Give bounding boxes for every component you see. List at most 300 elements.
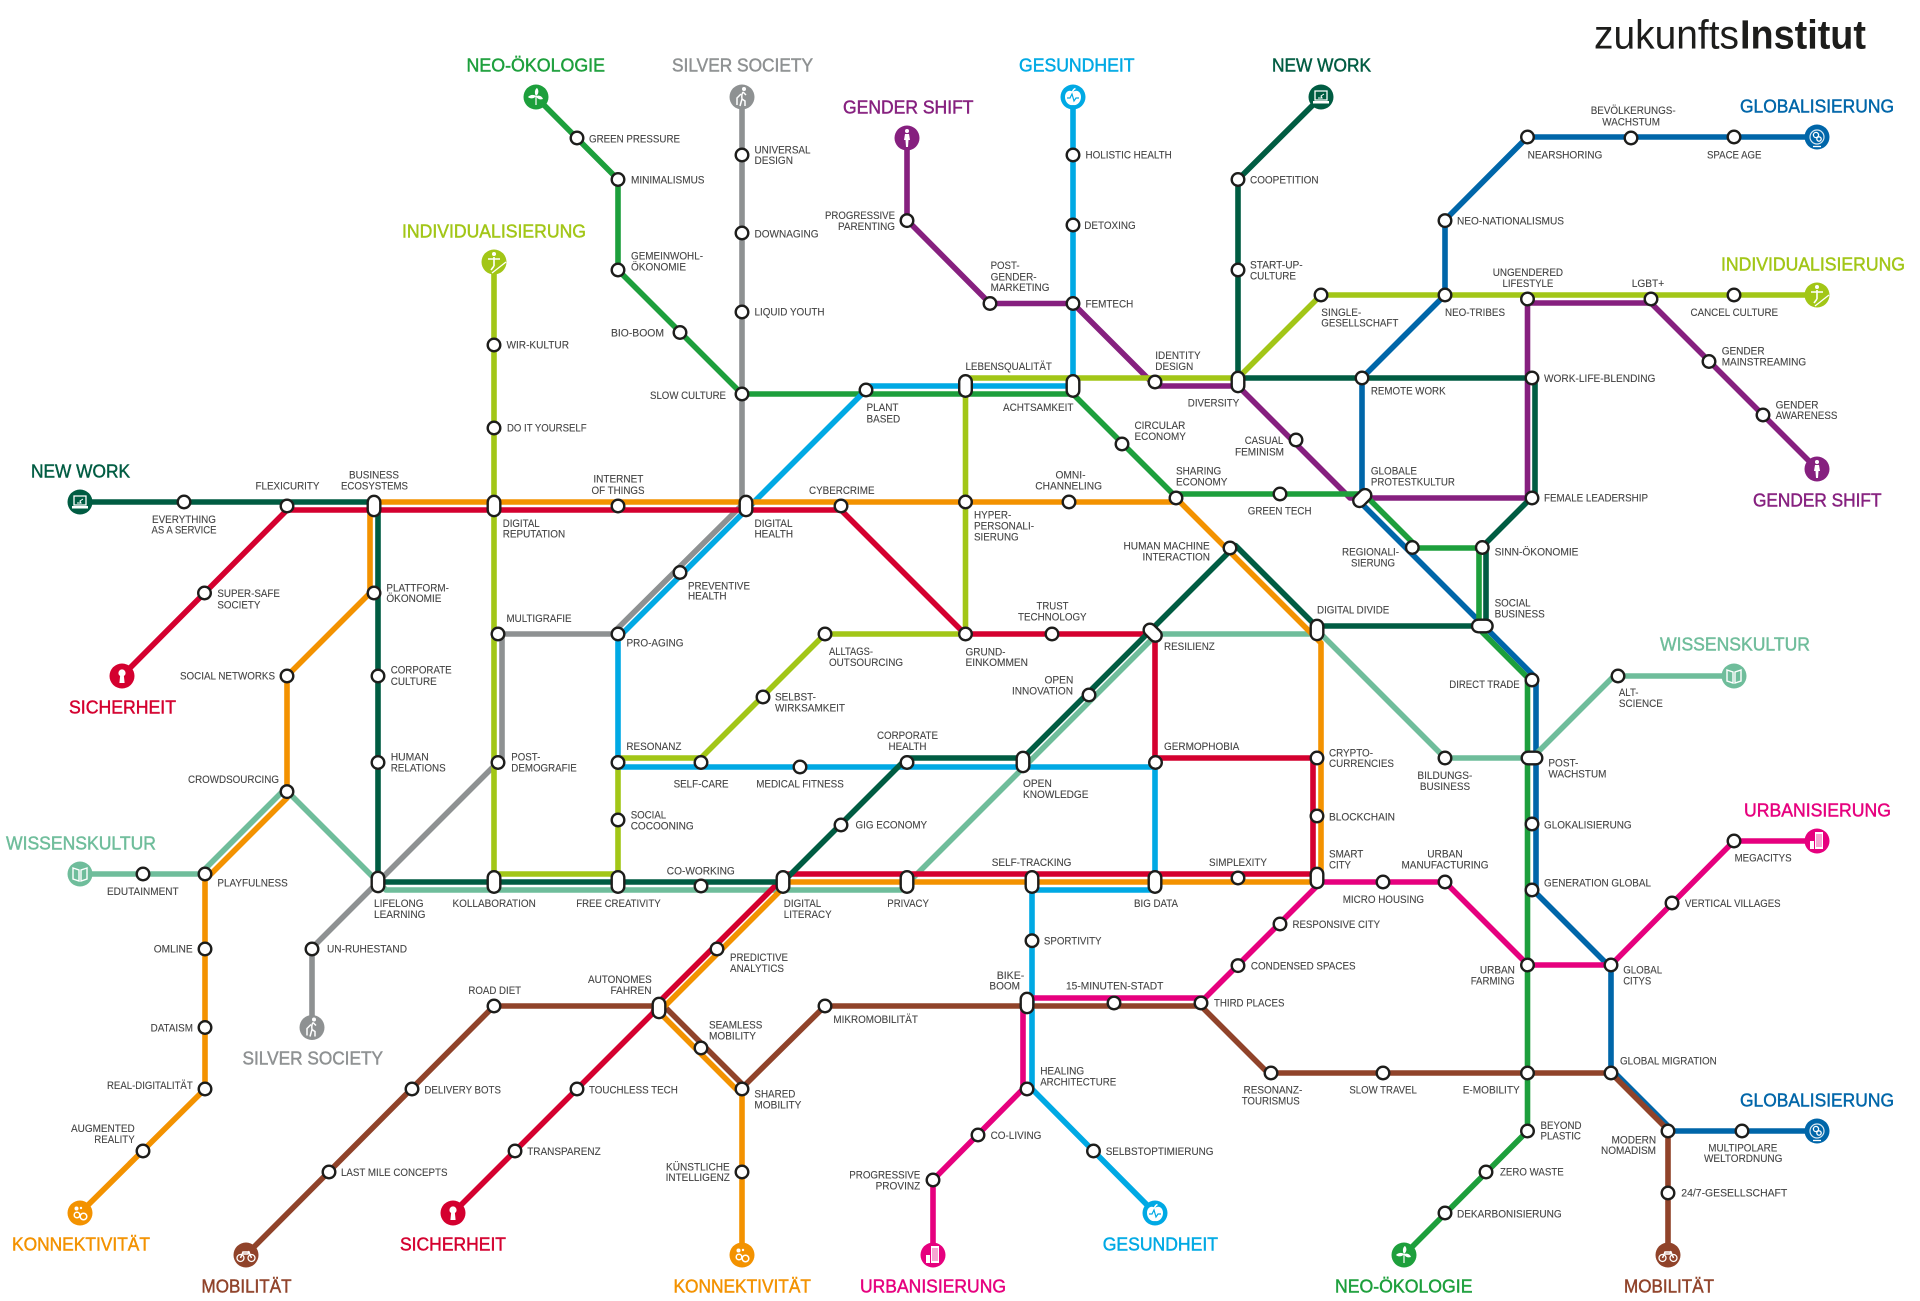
station: Plant Based: PLANT bbox=[866, 402, 899, 414]
station: Circular Economy: CIRCULAR bbox=[1134, 420, 1185, 432]
station: Trust Technology bbox=[1018, 600, 1087, 640]
station: Shared Mobility: SHARED bbox=[754, 1089, 795, 1101]
station: Crowdsourcing bbox=[188, 774, 293, 798]
station: Condensed Spaces: CONDENSED SPACES bbox=[1251, 960, 1356, 972]
line: Individualisierung bbox=[494, 262, 1817, 874]
station: Resonanz bbox=[612, 741, 681, 769]
station: Bildungs-Business bbox=[1417, 752, 1473, 793]
station: Holistic Health bbox=[1067, 149, 1172, 161]
station: Bio-Boom: BIO-BOOM bbox=[611, 327, 664, 339]
station: Slow Travel bbox=[1349, 1067, 1417, 1096]
station: Road Diet bbox=[468, 985, 521, 1012]
station: Social Business bbox=[1472, 598, 1545, 632]
station: Künstliche Intelligenz: KÜNSTLICHE bbox=[666, 1161, 730, 1173]
station: Wir-Kultur: WIR-KULTUR bbox=[506, 339, 569, 351]
station: Trust Technology: TECHNOLOGY bbox=[1018, 611, 1087, 623]
icon: Wissenskultur book right bbox=[1722, 664, 1746, 688]
icon: New Work laptop bbox=[68, 490, 92, 514]
station: Digital Health: DIGITAL bbox=[754, 518, 792, 530]
station: Co-Working: CO-WORKING bbox=[667, 865, 735, 877]
station: Transparenz: TRANSPARENZ bbox=[527, 1146, 601, 1158]
line: Neo-Ökologie bbox=[536, 97, 1528, 1255]
station: Self-Tracking: SELF-TRACKING bbox=[992, 857, 1072, 869]
station: Privacy: PRIVACY bbox=[887, 898, 929, 910]
station: Human Machine Interaction: HUMAN MACHINE bbox=[1124, 541, 1210, 553]
station: Regionalisierung bbox=[1342, 541, 1419, 569]
station: 15-Minuten-Stadt bbox=[1066, 981, 1163, 1009]
station: Digital Divide: DIGITAL DIVIDE bbox=[1317, 605, 1390, 617]
station: Selbstoptimierung: SELBSTOPTIMIERUNG bbox=[1106, 1146, 1214, 1158]
station: Ungendered Lifestyle bbox=[1493, 267, 1563, 305]
station: Multipolare Weltordnung: MULTIPOLARE bbox=[1708, 1142, 1778, 1154]
icon: Gender Shift person right bbox=[1804, 456, 1830, 482]
station: Coopetition: COOPETITION bbox=[1250, 174, 1319, 186]
station: Gender Awareness: GENDER bbox=[1776, 399, 1818, 411]
station: Multipolare Weltordnung bbox=[1704, 1125, 1783, 1165]
station: Sharing Economy: ECONOMY bbox=[1176, 476, 1228, 488]
station: Selbstwirksamkeit: SELBST- bbox=[775, 691, 816, 703]
station: Multipolare Weltordnung: WELTORDNUNG bbox=[1704, 1153, 1783, 1165]
station: Post-Wachstum bbox=[1522, 752, 1606, 780]
station: LGBT+: LGBT+ bbox=[1632, 278, 1665, 290]
station: Grundeinkommen: EINKOMMEN bbox=[966, 657, 1028, 669]
station: Blockchain: BLOCKCHAIN bbox=[1329, 811, 1395, 823]
station: Lebensqualität bbox=[959, 361, 1052, 397]
station: Open Knowledge: OPEN bbox=[1023, 778, 1052, 790]
station: E-Mobility: E-MOBILITY bbox=[1463, 1084, 1520, 1096]
station: Smart City: CITY bbox=[1329, 859, 1351, 871]
station: Downaging bbox=[736, 227, 819, 240]
station: Dekarbonisierung: DEKARBONISIERUNG bbox=[1457, 1208, 1562, 1220]
station: Last Mile Concepts: LAST MILE CONCEPTS bbox=[341, 1167, 448, 1179]
icon: Wissenskultur book left bbox=[68, 862, 92, 886]
station: Healing Architecture: HEALING bbox=[1040, 1065, 1084, 1077]
heading: Wissenskultur right: WISSENSKULTUR bbox=[1660, 633, 1810, 654]
station: Human Relations bbox=[372, 751, 446, 774]
line: Konnektivität bbox=[80, 502, 1321, 1255]
icon: Silver Society walker bbox=[730, 84, 754, 110]
station: Modern Nomadism: NOMADISM bbox=[1601, 1145, 1656, 1157]
station: Glokalisierung: GLOKALISIERUNG bbox=[1544, 819, 1632, 831]
station: Everything as a Service: EVERYTHING bbox=[152, 514, 216, 526]
station: Direct Trade: DIRECT TRADE bbox=[1449, 679, 1520, 691]
heading: Mobilität right: MOBILITÄT bbox=[1624, 1275, 1714, 1296]
station: Bevölkerungswachstum: BEVÖLKERUNGS- bbox=[1591, 105, 1676, 117]
station: Responsive City: RESPONSIVE CITY bbox=[1292, 919, 1380, 931]
station: Playfulness: PLAYFULNESS bbox=[217, 878, 288, 890]
station: Corporate Culture: CULTURE bbox=[391, 676, 437, 688]
station: Mikromobilität bbox=[819, 1000, 918, 1026]
icon: Mobilität bike bbox=[234, 1242, 258, 1268]
icon: Sicherheit keyhole bottom bbox=[440, 1200, 466, 1226]
station: Dekarbonisierung bbox=[1439, 1207, 1562, 1220]
station: Femtech bbox=[1067, 297, 1133, 310]
station: Post-Demografie: POST- bbox=[511, 751, 540, 763]
station: Omline: OMLINE bbox=[154, 944, 193, 956]
station: Neo-Nationalismus: NEO-NATIONALISMUS bbox=[1457, 216, 1564, 228]
station: Social Networks: SOCIAL NETWORKS bbox=[180, 670, 275, 682]
station: Bike-Boom: BOOM bbox=[989, 981, 1020, 993]
station: Social Cocooning: COCOONING bbox=[631, 820, 694, 832]
station: Delivery Bots: DELIVERY BOTS bbox=[424, 1084, 501, 1096]
station: Slow Travel: SLOW TRAVEL bbox=[1349, 1084, 1417, 1096]
station: Seamless Mobility bbox=[695, 1019, 763, 1054]
station: Resilienz: RESILIENZ bbox=[1164, 641, 1215, 653]
station: Human Relations: RELATIONS bbox=[391, 762, 446, 774]
icon: Neo-Ökologie leaf bbox=[524, 84, 548, 110]
heading: Urbanisierung right: URBANISIERUNG bbox=[1744, 799, 1891, 820]
station: Smart City: SMART bbox=[1329, 849, 1363, 861]
station: Holistic Health: HOLISTIC HEALTH bbox=[1086, 149, 1172, 161]
icon: Gesundheit apple bottom bbox=[1142, 1200, 1168, 1226]
icon: Globalisierung globe bottom bbox=[1804, 1118, 1830, 1144]
heading: Globalisierung top: GLOBALISIERUNG bbox=[1740, 95, 1894, 116]
station: Digital Reputation: DIGITAL bbox=[503, 518, 540, 530]
station: Alltags-Outsourcing bbox=[819, 628, 903, 669]
heading: Konnektivität bottom: KONNEKTIVITÄT bbox=[674, 1275, 811, 1296]
icon: Urbanisierung building bottom bbox=[920, 1242, 946, 1268]
station: Megacitys: MEGACITYS bbox=[1735, 852, 1792, 864]
station: Post-Gender-Marketing: MARKETING bbox=[991, 282, 1050, 294]
station: Plattform-Ökonomie: PLATTFORM- bbox=[386, 582, 449, 594]
station: Achtsamkeit: ACHTSAMKEIT bbox=[1003, 402, 1073, 414]
station: Vertical Villages: VERTICAL VILLAGES bbox=[1685, 898, 1781, 910]
heading: Neo-Ökologie top: NEO-ÖKOLOGIE bbox=[466, 54, 605, 75]
station: Urban Manufacturing: MANUFACTURING bbox=[1402, 859, 1489, 871]
station: Augmented Reality bbox=[71, 1123, 149, 1157]
station: 24/7-Gesellschaft: 24/7-GESELLSCHAFT bbox=[1681, 1187, 1787, 1199]
station: Gig Economy bbox=[835, 819, 927, 831]
station: Künstliche Intelligenz bbox=[666, 1161, 748, 1184]
station: Femtech: FEMTECH bbox=[1086, 298, 1133, 310]
station: Internet of Things: INTERNET bbox=[593, 473, 643, 485]
heading: Gesundheit bottom: GESUNDHEIT bbox=[1103, 1233, 1218, 1254]
heading: Wissenskultur left: WISSENSKULTUR bbox=[6, 832, 156, 853]
station: Digital Reputation: REPUTATION bbox=[503, 529, 565, 541]
station: Detoxing: DETOXING bbox=[1084, 220, 1136, 232]
line: Mobilität bbox=[246, 1006, 1668, 1255]
station: Green Pressure bbox=[571, 132, 680, 145]
line: Silver Society bbox=[312, 97, 742, 1027]
station: Bevölkerungswachstum: WACHSTUM bbox=[1602, 116, 1660, 128]
station: Bildungs-Business: BUSINESS bbox=[1420, 781, 1470, 793]
station: Touchless Tech: TOUCHLESS TECH bbox=[589, 1084, 678, 1096]
station: Autonomes Fahren bbox=[588, 974, 665, 1018]
station: Simplexity bbox=[1209, 857, 1267, 884]
station: Social Business: SOCIAL bbox=[1495, 598, 1531, 610]
station: Start-up-Culture: CULTURE bbox=[1250, 270, 1296, 282]
station: Post-Demografie bbox=[492, 751, 577, 774]
station: Digital Reputation bbox=[488, 496, 565, 541]
station: Identity Design: IDENTITY bbox=[1155, 350, 1201, 362]
station: Circular Economy: ECONOMY bbox=[1134, 431, 1186, 443]
station: Green Tech bbox=[1248, 488, 1312, 517]
station: Resonanz-Tourismus: RESONANZ- bbox=[1244, 1084, 1302, 1096]
station: Neo-Tribes bbox=[1439, 289, 1505, 319]
station: Omni-Channeling: CHANNELING bbox=[1035, 480, 1102, 492]
station: Lifelong Learning bbox=[372, 872, 426, 921]
station: Lifelong Learning: LIFELONG bbox=[374, 898, 424, 910]
station: Shared Mobility: MOBILITY bbox=[754, 1099, 802, 1111]
station: Global Citys bbox=[1605, 959, 1662, 987]
heading: Sicherheit bottom: SICHERHEIT bbox=[400, 1233, 506, 1254]
icon: Konnektivität network bbox=[68, 1200, 92, 1226]
station: Corporate Culture bbox=[372, 665, 452, 688]
heading: Urbanisierung bottom: URBANISIERUNG bbox=[860, 1275, 1006, 1296]
station: Corporate Culture: CORPORATE bbox=[391, 665, 452, 677]
station: Grundeinkommen bbox=[959, 628, 1028, 669]
heading: Mobilität left: MOBILITÄT bbox=[202, 1275, 292, 1296]
station: Trust Technology: TRUST bbox=[1036, 600, 1069, 612]
logo: zukunftsInstitut bbox=[1594, 11, 1866, 57]
station: Medical Fitness bbox=[756, 761, 844, 790]
station: Global Citys: CITYS bbox=[1623, 975, 1652, 987]
station: Global Citys: GLOBAL bbox=[1623, 965, 1662, 977]
station: Gemeinwohl-Ökonomie: ÖKONOMIE bbox=[631, 261, 686, 273]
station: Pro-Aging: PRO-AGING bbox=[626, 638, 684, 650]
station: Autonomes Fahren: AUTONOMES bbox=[588, 974, 652, 986]
station: Cancel Culture bbox=[1690, 289, 1778, 319]
station: Corporate Health: HEALTH bbox=[888, 741, 926, 753]
station: Bike-Boom bbox=[989, 970, 1033, 1013]
station: Road Diet: ROAD DIET bbox=[468, 985, 521, 997]
station: Sinn-Ökonomie bbox=[1476, 541, 1579, 558]
station: Nearshoring: NEARSHORING bbox=[1528, 149, 1602, 161]
line: Globalisierung bbox=[1362, 137, 1817, 1131]
station: Sportivity: SPORTIVITY bbox=[1044, 935, 1102, 947]
heading: Konnektivität left: KONNEKTIVITÄT bbox=[12, 1233, 150, 1254]
station: Hyper-Personalisierung: HYPER- bbox=[974, 510, 1011, 522]
station: LGBT+ bbox=[1632, 278, 1665, 305]
station: Identity Design: DESIGN bbox=[1155, 361, 1193, 373]
station: Last Mile Concepts bbox=[323, 1166, 448, 1179]
line: Gender Shift bbox=[907, 138, 1817, 498]
logo: zukunftsInstitut: zukunfts bbox=[1594, 11, 1739, 57]
station: Autonomes Fahren: FAHREN bbox=[610, 985, 652, 997]
station: Post-Wachstum: POST- bbox=[1548, 758, 1579, 770]
station: Gig Economy: GIG ECONOMY bbox=[856, 819, 927, 831]
station: Predictive Analytics: PREDICTIVE bbox=[730, 952, 788, 964]
icon: Urbanisierung building right bbox=[1804, 828, 1830, 854]
station: Cybercrime: CYBERCRIME bbox=[809, 485, 875, 497]
station: Globale Protestkultur bbox=[1351, 466, 1455, 510]
station: Selbstwirksamkeit bbox=[757, 691, 845, 714]
station: Plattform-Ökonomie bbox=[368, 582, 449, 605]
station: Co-Working bbox=[667, 865, 735, 892]
station: Edutainment bbox=[107, 868, 179, 898]
station: Hyper-Personalisierung: SIERUNG bbox=[974, 531, 1019, 543]
station: Sharing Economy: SHARING bbox=[1176, 466, 1221, 478]
station: Responsive City bbox=[1274, 918, 1380, 931]
station: Urban Manufacturing bbox=[1402, 849, 1489, 888]
line: New Work bbox=[80, 97, 1535, 882]
station: Free Creativity bbox=[576, 871, 661, 910]
station: Flexicurity bbox=[256, 480, 320, 512]
station: Urban Manufacturing: URBAN bbox=[1427, 849, 1463, 861]
station: Gender Mainstreaming bbox=[1703, 345, 1806, 368]
station: Alt-Science bbox=[1612, 670, 1663, 710]
logo: zukunftsInstitut: Institut bbox=[1740, 11, 1866, 57]
station: Business Ecosystems: ECOSYSTEMS bbox=[341, 480, 408, 492]
station: Germophobia bbox=[1149, 741, 1240, 769]
station: Digital Divide bbox=[1311, 605, 1390, 640]
station: Universal Design bbox=[736, 144, 810, 167]
station: Progressive Parenting bbox=[825, 210, 913, 233]
icon: Gender Shift person bbox=[894, 126, 920, 150]
station: Resonanz-Tourismus: TOURISMUS bbox=[1242, 1095, 1300, 1107]
station: Big Data: BIG DATA bbox=[1134, 898, 1178, 910]
station: Detoxing bbox=[1067, 219, 1136, 232]
station: Casual Feminism: CASUAL bbox=[1245, 435, 1283, 447]
station: Generation Global bbox=[1526, 878, 1651, 896]
icon: Gesundheit apple bbox=[1060, 84, 1086, 110]
station: Globale Protestkultur: GLOBALE bbox=[1371, 466, 1417, 478]
station: Glokalisierung bbox=[1526, 818, 1632, 831]
station: Do it yourself: DO IT YOURSELF bbox=[507, 422, 587, 434]
station: Regionalisierung: REGIONALI- bbox=[1342, 547, 1399, 559]
heading: New Work left: NEW WORK bbox=[31, 460, 131, 481]
station: Playfulness bbox=[199, 868, 288, 890]
station: Diversity: DIVERSITY bbox=[1188, 398, 1240, 410]
station: Wir-Kultur bbox=[488, 339, 569, 351]
icon: Silver Society walker bottom bbox=[300, 1015, 324, 1040]
station: E-Mobility bbox=[1463, 1067, 1534, 1096]
station: Medical Fitness: MEDICAL FITNESS bbox=[756, 778, 844, 790]
station: Digital Literacy: LITERACY bbox=[784, 909, 832, 921]
station: Predictive Analytics bbox=[711, 943, 788, 975]
station: Healing Architecture bbox=[1021, 1065, 1117, 1095]
station: Alt-Science: ALT- bbox=[1619, 687, 1639, 699]
station: Kollaboration bbox=[452, 871, 536, 910]
heading: Sicherheit left: SICHERHEIT bbox=[69, 696, 176, 717]
station: Space Age bbox=[1707, 131, 1762, 161]
station: Social Business: BUSINESS bbox=[1495, 609, 1545, 621]
station: Regionalisierung: SIERUNG bbox=[1351, 557, 1395, 569]
station: Pro-Aging bbox=[612, 628, 684, 650]
station: Alltags-Outsourcing: OUTSOURCING bbox=[829, 657, 903, 669]
station: Single-Gesellschaft: SINGLE- bbox=[1321, 307, 1361, 319]
station: Internet of Things: OF THINGS bbox=[592, 485, 645, 497]
station: Identity Design bbox=[1149, 350, 1201, 388]
station: Gender Awareness bbox=[1757, 399, 1838, 422]
station: Achtsamkeit bbox=[1003, 375, 1079, 414]
station: Green Pressure: GREEN PRESSURE bbox=[589, 133, 680, 145]
station: Kollaboration: KOLLABORATION bbox=[452, 898, 536, 910]
station: Universal Design: UNIVERSAL bbox=[754, 144, 810, 156]
station: Downaging: DOWNAGING bbox=[754, 228, 819, 240]
heading: Globalisierung bottom: GLOBALISIERUNG bbox=[1740, 1089, 1894, 1110]
station: Transparenz bbox=[509, 1145, 601, 1158]
station: Beyond Plastic bbox=[1521, 1120, 1582, 1143]
station: Flexicurity: FLEXICURITY bbox=[256, 480, 320, 492]
station: Female Leadership: FEMALE LEADERSHIP bbox=[1544, 492, 1648, 504]
station: Sinn-Ökonomie: SINN-ÖKONOMIE bbox=[1495, 547, 1579, 559]
station: Resonanz: RESONANZ bbox=[626, 741, 681, 753]
station: Augmented Reality: REALITY bbox=[94, 1134, 135, 1146]
station: Un-Ruhestand: UN-RUHESTAND bbox=[327, 944, 407, 956]
station: Post-Gender-Marketing: GENDER- bbox=[991, 271, 1037, 283]
station: Open Innovation bbox=[1012, 675, 1095, 701]
station: Liquid Youth bbox=[736, 306, 824, 318]
station: Circular Economy bbox=[1116, 420, 1186, 450]
station: Preventive Health bbox=[674, 566, 750, 602]
station: Un-Ruhestand bbox=[306, 943, 407, 956]
station: Künstliche Intelligenz: INTELLIGENZ bbox=[666, 1172, 730, 1184]
station: Third Places: THIRD PLACES bbox=[1214, 998, 1285, 1010]
station: Cancel Culture: CANCEL CULTURE bbox=[1690, 307, 1778, 319]
heading: Silver Society bottom: SILVER SOCIETY bbox=[242, 1047, 383, 1068]
station: Predictive Analytics: ANALYTICS bbox=[730, 963, 784, 975]
station: Gender Mainstreaming: GENDER bbox=[1722, 345, 1765, 357]
station: Micro Housing bbox=[1343, 876, 1424, 906]
station: Neo-Nationalismus bbox=[1439, 214, 1564, 228]
station: Generation Global: GENERATION GLOBAL bbox=[1544, 878, 1651, 890]
station: Seamless Mobility: SEAMLESS bbox=[709, 1019, 763, 1031]
station: Social Cocooning bbox=[612, 810, 694, 832]
station: Universal Design: DESIGN bbox=[754, 155, 793, 167]
station: Omline bbox=[154, 943, 211, 956]
station: Gemeinwohl-Ökonomie: GEMEINWOHL- bbox=[631, 250, 703, 262]
station: Smart City bbox=[1311, 849, 1363, 888]
station: Augmented Reality: AUGMENTED bbox=[71, 1123, 135, 1135]
station: Dataism: DATAISM bbox=[151, 1022, 193, 1034]
station: Remote Work: REMOTE WORK bbox=[1371, 386, 1446, 398]
station: Crowdsourcing: CROWDSOURCING bbox=[188, 774, 279, 786]
station: Self-Tracking bbox=[992, 857, 1072, 893]
station: Mikromobilität: MIKROMOBILITÄT bbox=[833, 1014, 918, 1026]
heading: Gesundheit top: GESUNDHEIT bbox=[1019, 54, 1134, 75]
station: Delivery Bots bbox=[406, 1083, 501, 1096]
station: Start-up-Culture bbox=[1232, 260, 1303, 282]
station: Self-Care: SELF-CARE bbox=[674, 778, 729, 790]
station: Globale Protestkultur: PROTESTKULTUR bbox=[1371, 476, 1455, 488]
station: Social Cocooning: SOCIAL bbox=[631, 810, 666, 822]
station: Neo-Tribes: NEO-TRIBES bbox=[1445, 307, 1505, 319]
heading: Individualisierung right: INDIVIDUALISIERUNG bbox=[1721, 253, 1905, 274]
station: Lifelong Learning: LEARNING bbox=[374, 909, 426, 921]
station: Urban Farming bbox=[1471, 959, 1534, 987]
station: Micro Housing: MICRO HOUSING bbox=[1343, 894, 1424, 906]
station: Preventive Health: PREVENTIVE bbox=[688, 580, 750, 592]
station: Post-Wachstum: WACHSTUM bbox=[1548, 768, 1606, 780]
station: Corporate Health: CORPORATE bbox=[877, 730, 938, 742]
station: Plant Based: BASED bbox=[866, 413, 900, 425]
station: Ungendered Lifestyle: LIFESTYLE bbox=[1502, 278, 1554, 290]
station: Progressive Parenting: PROGRESSIVE bbox=[825, 210, 895, 222]
station: Super-Safe Society bbox=[198, 587, 280, 611]
station: Plant Based bbox=[860, 384, 900, 425]
station: Co-Living bbox=[972, 1129, 1042, 1142]
station: Sharing Economy bbox=[1170, 466, 1228, 504]
station: Cryptocurrencies: CRYPTO- bbox=[1329, 747, 1373, 759]
station: Self-Care bbox=[674, 756, 729, 790]
station: Coopetition bbox=[1232, 173, 1319, 186]
station: Cybercrime bbox=[809, 485, 875, 512]
station: Internet of Things bbox=[592, 473, 645, 512]
icon: Individualisierung tightrope right bbox=[1804, 282, 1830, 308]
station: Post-Gender-Marketing: POST- bbox=[991, 260, 1020, 272]
station: Co-Living: CO-LIVING bbox=[991, 1130, 1042, 1142]
station: Super-Safe Society: SOCIETY bbox=[217, 599, 261, 611]
station: Hyper-Personalisierung: PERSONALI- bbox=[974, 520, 1034, 532]
station: Liquid Youth: LIQUID YOUTH bbox=[754, 306, 824, 318]
station: Post-Gender-Marketing bbox=[984, 260, 1050, 310]
station: Super-Safe Society: SUPER-SAFE bbox=[217, 588, 280, 600]
station: Beyond Plastic: BEYOND bbox=[1540, 1120, 1582, 1132]
station: Progressive Provinz: PROGRESSIVE bbox=[849, 1170, 921, 1182]
station: Privacy bbox=[887, 871, 929, 910]
station: Touchless Tech bbox=[571, 1083, 678, 1096]
